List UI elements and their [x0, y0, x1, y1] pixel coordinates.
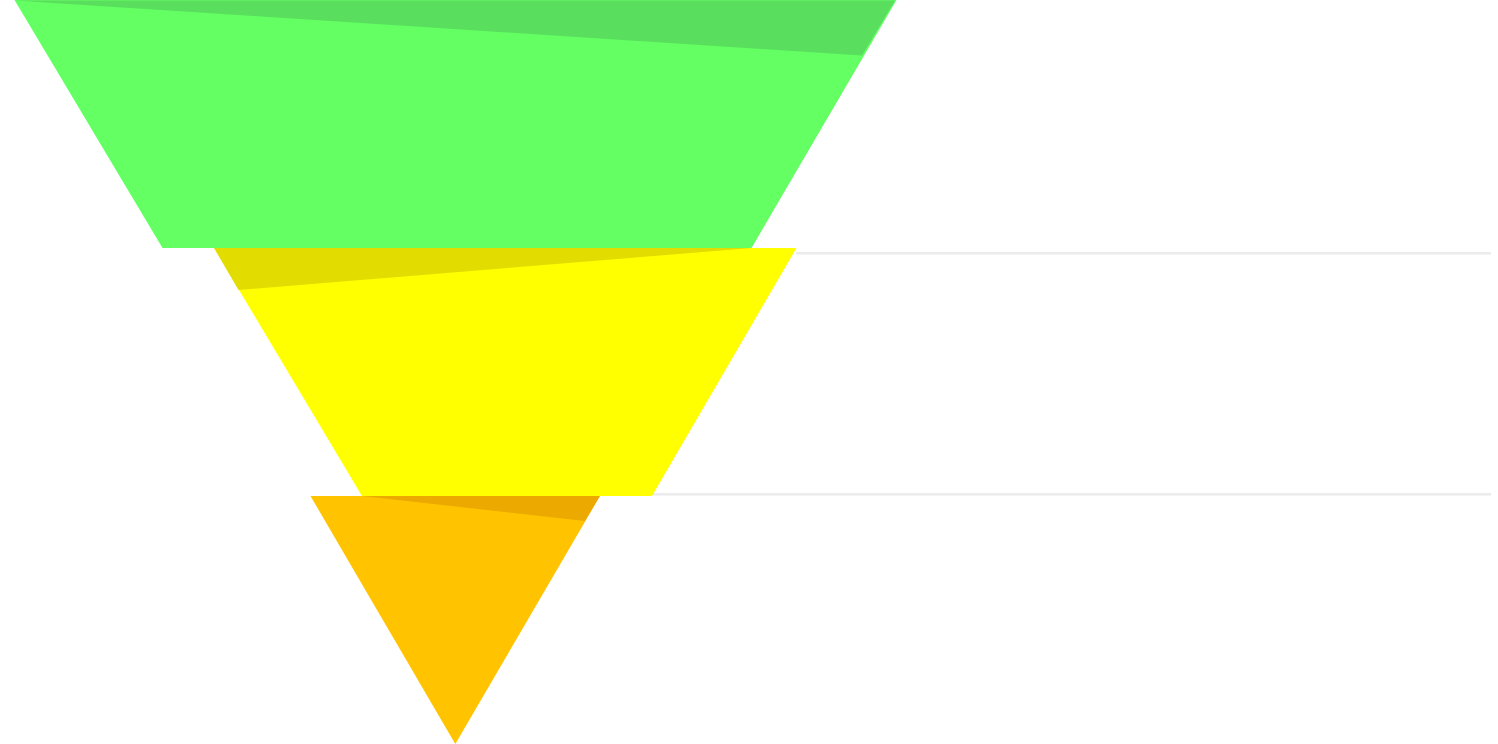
tier 1 shadow — [14, 0, 895, 56]
funnel tier 1: green — [14, 0, 896, 248]
tier 3 shadow — [362, 496, 600, 521]
funnel tier 2: yellow — [214, 248, 796, 496]
funnel tier 3: orange — [310, 496, 600, 744]
tier 2 shadow — [214, 248, 752, 290]
